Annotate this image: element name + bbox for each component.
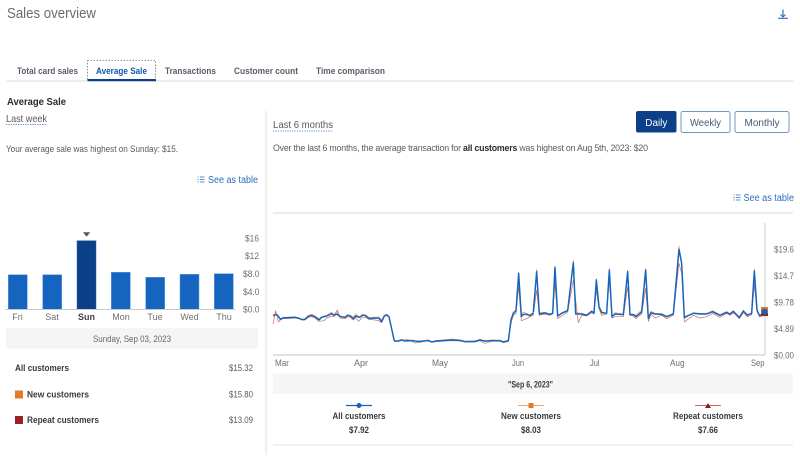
legend: all customers: $7.92	[349, 425, 369, 435]
legend: new customers: $8.03	[521, 425, 541, 435]
markers: selected point	[761, 307, 768, 316]
icon: selected bar marker	[83, 232, 90, 237]
tab: time comparison: Time comparison	[316, 66, 385, 76]
button: weekly	[681, 112, 730, 132]
row: repeat customers	[15, 415, 253, 425]
summary text: Over the last 6 months, the average transaction for all customers was highest on Aug 5th, 2023: $20	[273, 143, 648, 153]
line chart month labels: Apr	[354, 358, 368, 368]
bar chart value axis: $8.0	[243, 269, 260, 279]
legend: new customers	[501, 403, 561, 435]
summary text: Your average sale was highest on Sunday: $15.	[6, 144, 178, 154]
bar chart day labels: Wed	[180, 312, 199, 322]
bar chart value axis: $4.0	[243, 287, 260, 297]
bar chart value axis	[243, 234, 260, 314]
line chart month labels: May	[432, 358, 448, 368]
row: new customers: New customers	[27, 390, 89, 400]
bar chart value axis: $12	[245, 251, 259, 261]
bar chart day labels	[12, 312, 232, 322]
row: repeat customers: Repeat customers	[27, 415, 99, 425]
bar chart day labels: Sat	[45, 312, 59, 322]
panel heading: last 6 months: Last 6 months	[273, 119, 333, 131]
series: new customers line	[273, 246, 765, 342]
line chart month labels: Jul	[590, 358, 600, 368]
legend: new customers: New customers	[501, 411, 561, 421]
button: weekly: Weekly	[690, 117, 722, 129]
line chart: daily average sale	[273, 223, 794, 368]
button: daily: Daily	[645, 117, 668, 129]
button: daily	[636, 111, 676, 132]
bar chart value axis: $0.0	[243, 304, 260, 314]
row: all customers: All customers	[15, 363, 69, 373]
tab: average sale, active: Average Sale	[96, 66, 147, 76]
tab: customer count: Customer count	[234, 66, 298, 76]
row: new customers: $15.80	[229, 390, 253, 400]
panel heading: last week: Last week	[6, 113, 48, 125]
line chart value axis: $0.00	[774, 350, 794, 360]
bar chart: daily average sale	[5, 232, 260, 322]
row: all customers: $15.32	[229, 363, 253, 373]
line chart value axis: $14.7	[774, 271, 794, 281]
legend: repeat customers: Repeat customers	[673, 411, 743, 421]
legend: all customers	[332, 403, 386, 435]
bar chart value axis: $16	[245, 234, 259, 244]
series: repeat customers line	[273, 263, 765, 343]
series: all customers line	[273, 249, 765, 342]
interval buttons	[636, 111, 789, 132]
line chart value axis: $4.89	[774, 324, 794, 334]
line chart value axis	[774, 244, 794, 360]
bar chart day labels: Sun	[78, 312, 95, 322]
date band: "Sep 6, 2023"	[508, 380, 553, 390]
date band: Sunday, Sep 03, 2023	[93, 334, 171, 344]
section heading: Average Sale	[7, 96, 66, 108]
bar chart day labels: Tue	[147, 312, 163, 322]
tab: total card sales: Total card sales	[17, 66, 78, 76]
line chart month labels: Jun	[512, 358, 524, 368]
line chart month labels: Aug	[670, 358, 684, 368]
row: all customers	[15, 363, 253, 373]
panel: last week	[5, 113, 260, 425]
row: new customers	[15, 390, 253, 400]
line chart month labels	[275, 358, 764, 368]
button: monthly: Monthly	[744, 117, 780, 129]
tabs	[7, 60, 793, 81]
line chart value axis: $9.78	[774, 298, 794, 308]
title: Sales overview	[7, 5, 96, 22]
line chart month labels: Mar	[275, 358, 289, 368]
date band	[6, 328, 258, 348]
bar chart day labels: Mon	[112, 312, 130, 322]
bar chart day labels: Thu	[216, 312, 232, 322]
tab: average sale, active	[88, 60, 156, 81]
link: see as table: See as table	[744, 193, 795, 204]
legend: all customers: All customers	[332, 411, 386, 421]
legend: repeat customers: $7.66	[698, 425, 718, 435]
legend: repeat customers	[673, 403, 743, 435]
bar chart day labels: Fri	[12, 312, 23, 322]
icon: download	[778, 10, 788, 18]
tab: transactions: Transactions	[165, 66, 216, 76]
button: monthly	[735, 112, 789, 132]
link: see as table: See as table	[208, 175, 259, 186]
date band	[273, 374, 793, 394]
panel: last 6 months	[273, 111, 795, 445]
line chart value axis: $19.6	[774, 244, 794, 254]
row: repeat customers: $13.09	[229, 415, 253, 425]
line chart month labels: Sep	[751, 358, 764, 368]
